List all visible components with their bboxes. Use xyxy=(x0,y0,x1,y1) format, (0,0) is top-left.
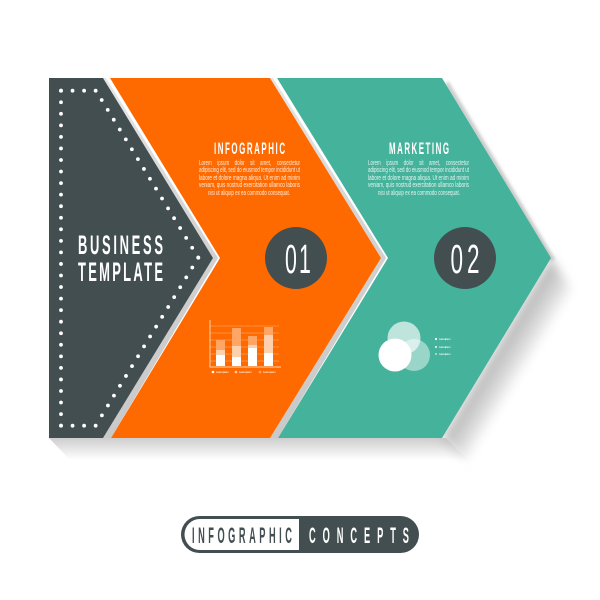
text block: orange paragraph xyxy=(199,158,301,197)
text block: teal paragraph: adipiscing elit, sed do eiusmod tempor incididunt ut xyxy=(368,165,470,174)
heading: business template: TEMPLATE xyxy=(78,258,163,287)
venn legend: Lorem ipsum xyxy=(439,352,452,356)
heading: business template: BUSINESS xyxy=(78,231,163,260)
footer pill: infographic concepts xyxy=(181,516,419,553)
text block: teal paragraph: nisi ut aliquip ex ea commodo consequat. xyxy=(378,188,460,197)
text block: orange paragraph: nisi ut aliquip ex ea commodo consequat. xyxy=(208,188,290,197)
gray fold band beside dark panel xyxy=(103,78,218,438)
text block: orange paragraph: adipiscing elit, sed do eiusmod tempor incididunt ut xyxy=(199,165,301,174)
text block: orange paragraph: labore et dolore magna aliqua. Ut enim ad minim xyxy=(199,173,300,182)
venn legend: Lorem ipsum xyxy=(439,337,452,341)
badge: 02: 02 xyxy=(450,237,480,283)
text block: teal paragraph: labore et dolore magna aliqua. Ut enim ad minim xyxy=(368,173,469,182)
venn legend xyxy=(435,337,452,356)
gray fold band beside orange panel xyxy=(270,78,386,438)
text block: teal paragraph xyxy=(368,158,470,197)
panel: orange infographic arrow xyxy=(110,78,381,438)
chart legend: Lorem ipsum xyxy=(263,370,276,374)
text block: teal paragraph: veniam, quis nostrud exercitation ullamco laboris xyxy=(368,180,469,189)
footer pill: infographic concepts: CONCEPTS xyxy=(309,523,409,548)
venn diagram xyxy=(378,322,452,372)
dotted border xyxy=(61,91,198,426)
footer pill: infographic concepts: INFOGRAPHIC xyxy=(192,523,292,548)
text block: orange paragraph: Lorem ipsum dolor sit amet, consectetur xyxy=(199,158,300,167)
panel: teal marketing arrow xyxy=(277,78,551,438)
chart legend xyxy=(212,370,276,374)
text block: orange paragraph: veniam, quis nostrud exercitation ullamco laboris xyxy=(199,180,300,189)
badge: 01: 01 xyxy=(285,235,311,282)
panel: dark business template arrow xyxy=(49,78,213,438)
heading: infographic: INFOGRAPHIC xyxy=(214,139,285,158)
chart legend: Lorem ipsum xyxy=(239,370,252,374)
text block: teal paragraph: Lorem ipsum dolor sit amet, consectetur xyxy=(368,158,469,167)
badge: 02 xyxy=(434,227,496,289)
chart legend: Lorem ipsum xyxy=(216,370,230,374)
heading: business template xyxy=(78,231,163,287)
shadow under the arrows xyxy=(49,81,572,462)
venn legend: Lorem ipsum xyxy=(439,345,452,349)
heading: marketing: MARKETING xyxy=(389,139,449,158)
bar chart xyxy=(210,320,281,374)
badge: 01 xyxy=(265,227,327,289)
